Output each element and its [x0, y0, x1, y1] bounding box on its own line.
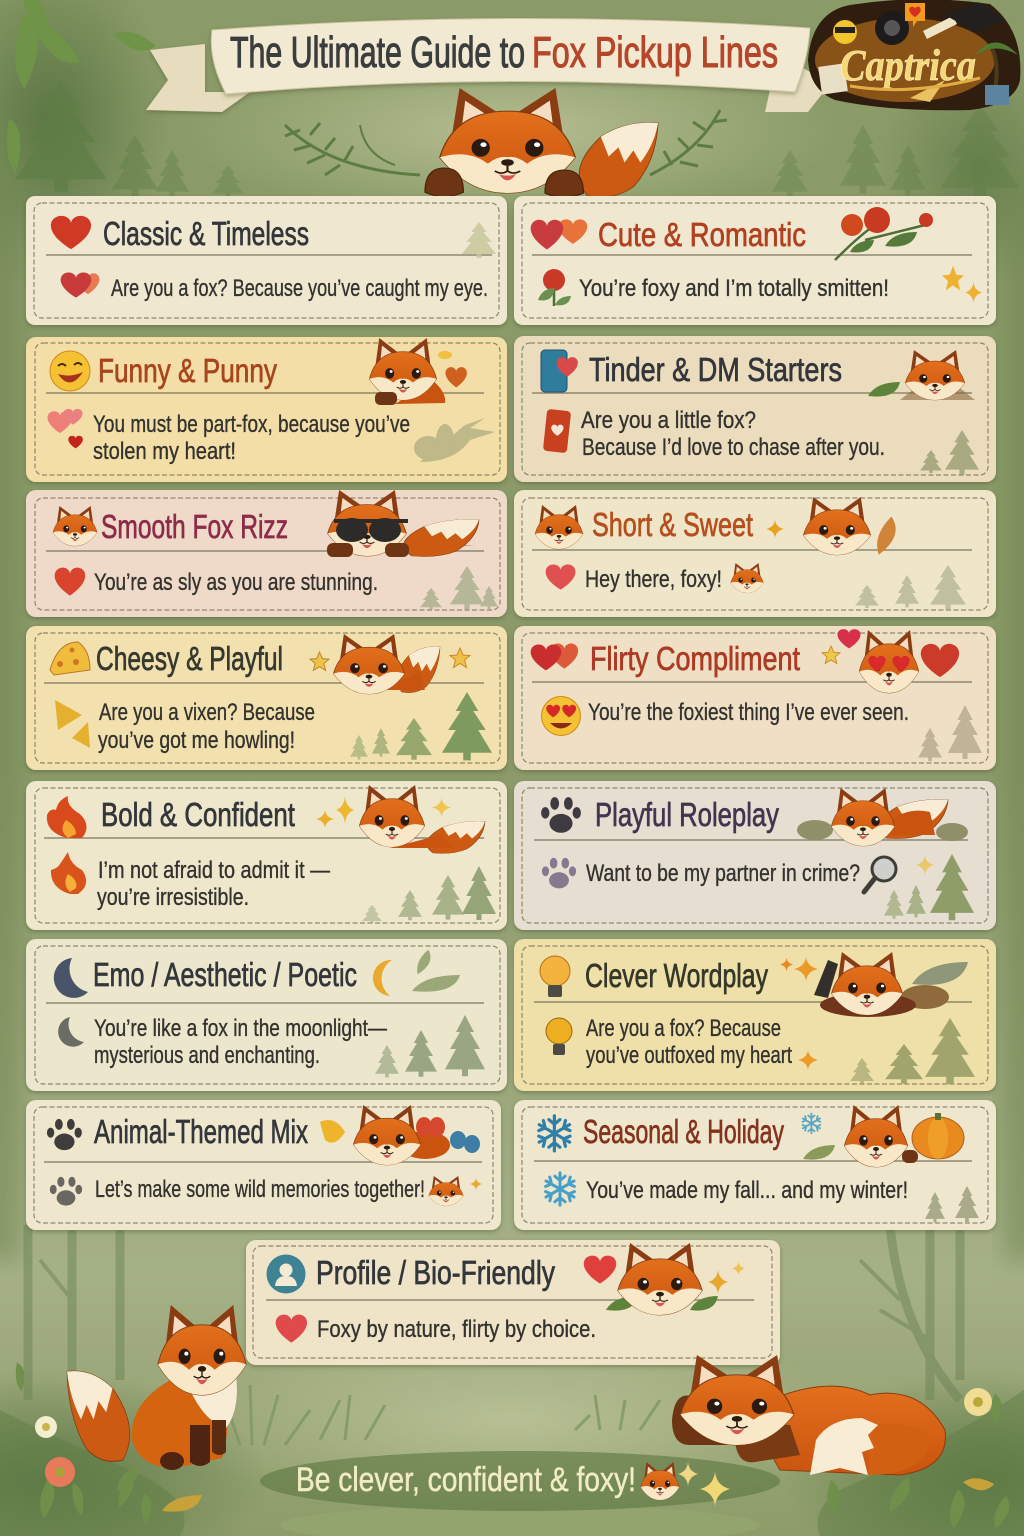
- bottom forest trunks: [28, 1225, 960, 1400]
- icon: cheese pieces: [55, 700, 90, 748]
- line: You’ve made my fall... and my winter!: [586, 1177, 908, 1204]
- lines: [98, 699, 315, 754]
- title text: The Ultimate Guide to: [230, 28, 525, 77]
- icon: crescent moon: [58, 1017, 84, 1047]
- panel: bold: [26, 781, 507, 930]
- lines: Are you a vixen? Because: [99, 699, 315, 726]
- icon: flame: [51, 852, 86, 894]
- lines: I’m not afraid to admit it —: [98, 857, 330, 884]
- icon: fox with heart eyes: [822, 629, 959, 693]
- icon: snowflake: [539, 1116, 570, 1151]
- icon: flowers: [35, 1388, 992, 1487]
- lines: [93, 411, 410, 465]
- heading: Playful Roleplay: [595, 796, 779, 833]
- line: Let’s make some wild memories together!: [95, 1176, 425, 1203]
- trees: [850, 1018, 975, 1084]
- heading: Clever Wordplay: [585, 957, 768, 994]
- lines: You must be part-fox, because you’ve: [93, 411, 410, 438]
- icon: fox with stars: [310, 634, 470, 694]
- icon: hearts: [61, 272, 99, 298]
- icon: hearts: [48, 409, 83, 448]
- icon: cheese: [50, 642, 90, 675]
- lines: Are you a fox? Because: [586, 1015, 781, 1042]
- lines: [97, 857, 330, 911]
- panel: short: [514, 490, 996, 617]
- panel: clever: [514, 939, 996, 1091]
- heading: Seasonal & Holiday: [583, 1113, 784, 1150]
- icon: hearts: [531, 219, 587, 249]
- panel: classic: [26, 196, 507, 325]
- lines: stolen my heart!: [93, 438, 236, 465]
- bottom foliage: [0, 1362, 1024, 1536]
- icon: fox and sparkles: [641, 1462, 730, 1506]
- icon: bulb: [546, 1018, 572, 1055]
- tagline: [260, 1451, 780, 1511]
- logo text: Captrica: [840, 41, 976, 90]
- lines: you’ve got me howling!: [98, 727, 295, 754]
- icon: fox with rocks: [797, 788, 968, 846]
- icon: spark: [766, 520, 784, 538]
- trees: [420, 566, 498, 610]
- panel: rizz: [26, 490, 507, 617]
- heading: Funny & Punny: [98, 352, 277, 389]
- trees: [350, 692, 492, 760]
- lines: Are you a little fox?: [581, 407, 756, 434]
- line: Foxy by nature, flirty by choice.: [317, 1316, 596, 1343]
- line: You’re as sly as you are stunning.: [94, 569, 378, 596]
- icon: heart eyes emoji: [542, 696, 580, 736]
- icon: roses: [835, 207, 933, 260]
- icon: moon and leaves: [373, 950, 460, 996]
- heading: Short & Sweet: [592, 506, 753, 543]
- panel: tinder: [514, 336, 996, 482]
- icon: small fox: [429, 1176, 482, 1206]
- trees: [920, 430, 979, 475]
- heading: Bold & Confident: [101, 796, 295, 833]
- heading: Smooth Fox Rizz: [101, 508, 288, 545]
- icon: magnifier: [864, 857, 896, 892]
- panel: animal: [26, 1100, 501, 1230]
- lying fox: [672, 1355, 945, 1475]
- closing line: Be clever, confident & foxy!: [296, 1461, 636, 1499]
- hero fox: [425, 88, 658, 197]
- forest trees top: [0, 0, 1020, 199]
- icon: spark: [798, 1050, 818, 1070]
- heading: Flirty Compliment: [590, 640, 800, 677]
- panel: roleplay: [514, 781, 996, 930]
- icon: hearts: [531, 643, 578, 670]
- ribbon tails: [146, 44, 250, 112]
- title banner: [146, 18, 830, 112]
- grass tufts: [225, 1385, 660, 1445]
- trees: [855, 565, 966, 610]
- line: You’re the foxiest thing I’ve ever seen.: [588, 699, 909, 726]
- panel: flirty: [514, 626, 996, 770]
- icon: stars: [942, 266, 982, 303]
- panel: emo: [26, 939, 507, 1091]
- leaf sprigs: [285, 110, 727, 175]
- trees: [884, 854, 974, 920]
- heading: Cute & Romantic: [598, 216, 806, 253]
- panel: profile: [246, 1240, 780, 1365]
- heading: Emo / Aesthetic / Poetic: [93, 956, 357, 993]
- icon: heart: [51, 216, 91, 249]
- icon: fox head with leaf: [803, 497, 905, 555]
- watermark leaves: [414, 418, 495, 462]
- trees: [375, 1015, 485, 1077]
- icon: phone: [541, 350, 578, 392]
- lines: [586, 1015, 792, 1069]
- lines: Because I’d love to chase after you.: [582, 434, 885, 461]
- panel: cheesy: [26, 626, 507, 770]
- icon: fox head small: [731, 563, 763, 593]
- lines: you’re irresistible.: [97, 884, 249, 911]
- icon: paw: [541, 797, 581, 833]
- icon: profile: [266, 1254, 306, 1294]
- heading: Tinder & DM Starters: [589, 351, 842, 388]
- heading: Classic & Timeless: [103, 215, 309, 252]
- icon: fox waving: [780, 952, 968, 1017]
- icon: fox with sunglasses: [327, 490, 479, 557]
- heading: Cheesy & Playful: [96, 640, 283, 677]
- heading: Profile / Bio-Friendly: [316, 1254, 555, 1291]
- icon: fox with heart: [584, 1243, 745, 1315]
- trees: [925, 1186, 979, 1222]
- lines: [94, 1015, 387, 1069]
- line: Are you a fox? Because you’ve caught my eye.: [111, 275, 488, 302]
- panel: funny: [26, 337, 507, 482]
- lines: mysterious and enchanting.: [94, 1042, 320, 1069]
- icon: fox head: [535, 505, 583, 549]
- icon: fox with heart: [369, 338, 467, 405]
- icon: paw: [50, 1177, 82, 1206]
- icon: bulb: [540, 956, 570, 997]
- line: Hey there, foxy!: [585, 566, 722, 593]
- icon: crescent moon: [54, 958, 88, 998]
- sitting fox: [67, 1305, 246, 1470]
- icon: paw: [47, 1119, 82, 1150]
- panel: seasonal: [514, 1100, 996, 1230]
- icon: fox with sparkles: [316, 785, 485, 853]
- icon: fox and leaves: [868, 350, 975, 400]
- trees: [362, 866, 496, 923]
- logo: Captrica: [808, 0, 1020, 110]
- icon: fox, bird and butterflies: [320, 1105, 480, 1165]
- icon: laughing emoji: [50, 351, 90, 391]
- lines: You’re like a fox in the moonlight—: [94, 1015, 387, 1042]
- line: You’re foxy and I’m totally smitten!: [579, 275, 889, 302]
- ribbon body: [211, 18, 810, 94]
- line: Want to be my partner in crime?: [586, 860, 860, 887]
- title text: Fox Pickup Lines: [532, 28, 778, 77]
- lines: [581, 407, 885, 461]
- icon: phone red: [543, 409, 571, 453]
- icon: heart: [546, 564, 576, 590]
- icon: heart: [55, 568, 85, 596]
- lines: you’ve outfoxed my heart: [586, 1042, 792, 1069]
- heading: Animal-Themed Mix: [94, 1113, 308, 1150]
- icon: paw: [542, 858, 576, 888]
- icon: rose: [538, 269, 571, 306]
- panel: cute: [514, 196, 996, 325]
- icon: heart: [276, 1315, 307, 1343]
- trees: [918, 705, 982, 761]
- icon: fox with pumpkin: [803, 1105, 964, 1167]
- icon: snowflake: [546, 1173, 574, 1205]
- icon: fox head: [53, 506, 97, 546]
- icon: flame: [47, 796, 87, 838]
